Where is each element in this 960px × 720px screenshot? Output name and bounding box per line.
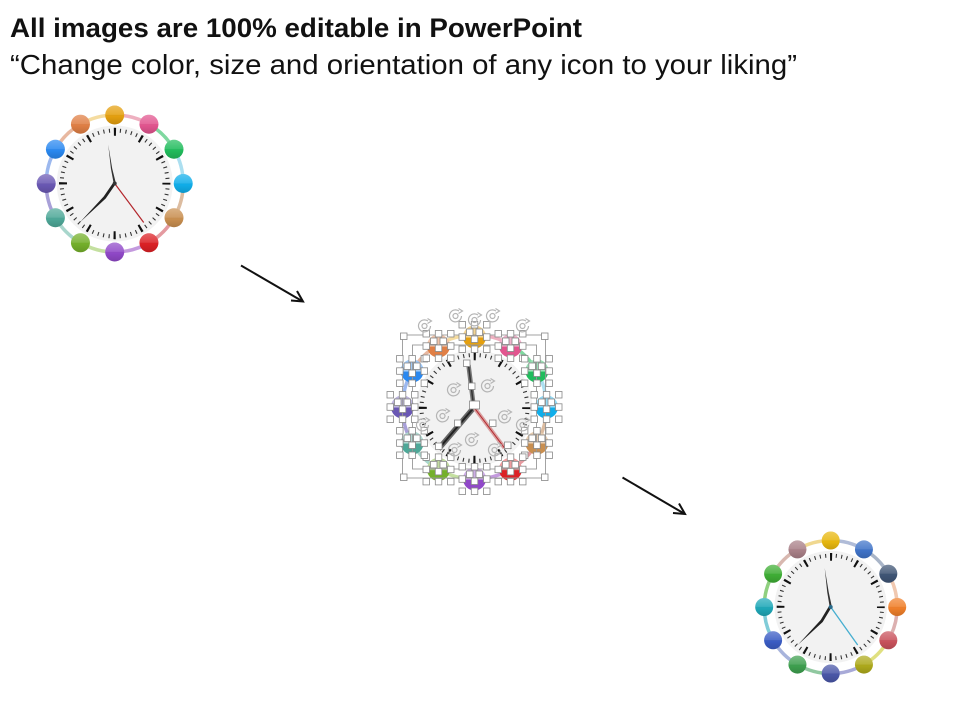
clock balls (37, 106, 193, 262)
arrow: second to third clock (622, 478, 685, 514)
arrow: first to second clock (241, 266, 303, 302)
ring segments (764, 540, 897, 674)
title: All images are 100% editable in PowerPoint (10, 13, 582, 43)
subtitle: “Change color, size and orientation of any icon to your liking” (10, 49, 797, 80)
clock face and ticks (416, 350, 532, 466)
clock: recoloured, bottom right (755, 532, 906, 682)
edit handles on balls (387, 322, 562, 494)
clock: original colours, top left (37, 106, 193, 262)
clock face and ticks (774, 551, 887, 663)
edit handles on hands (400, 333, 548, 480)
ring segments (402, 335, 547, 479)
clock face and ticks (57, 126, 173, 242)
ring segments (46, 115, 183, 252)
clock hands (438, 365, 504, 449)
clock: selected with edit handles, centre (387, 308, 562, 494)
clock balls (755, 532, 906, 682)
rotation handles (417, 308, 530, 456)
clock balls (391, 326, 558, 490)
clock hands (80, 144, 144, 222)
clock hands (798, 568, 858, 645)
selection frame (402, 335, 546, 478)
